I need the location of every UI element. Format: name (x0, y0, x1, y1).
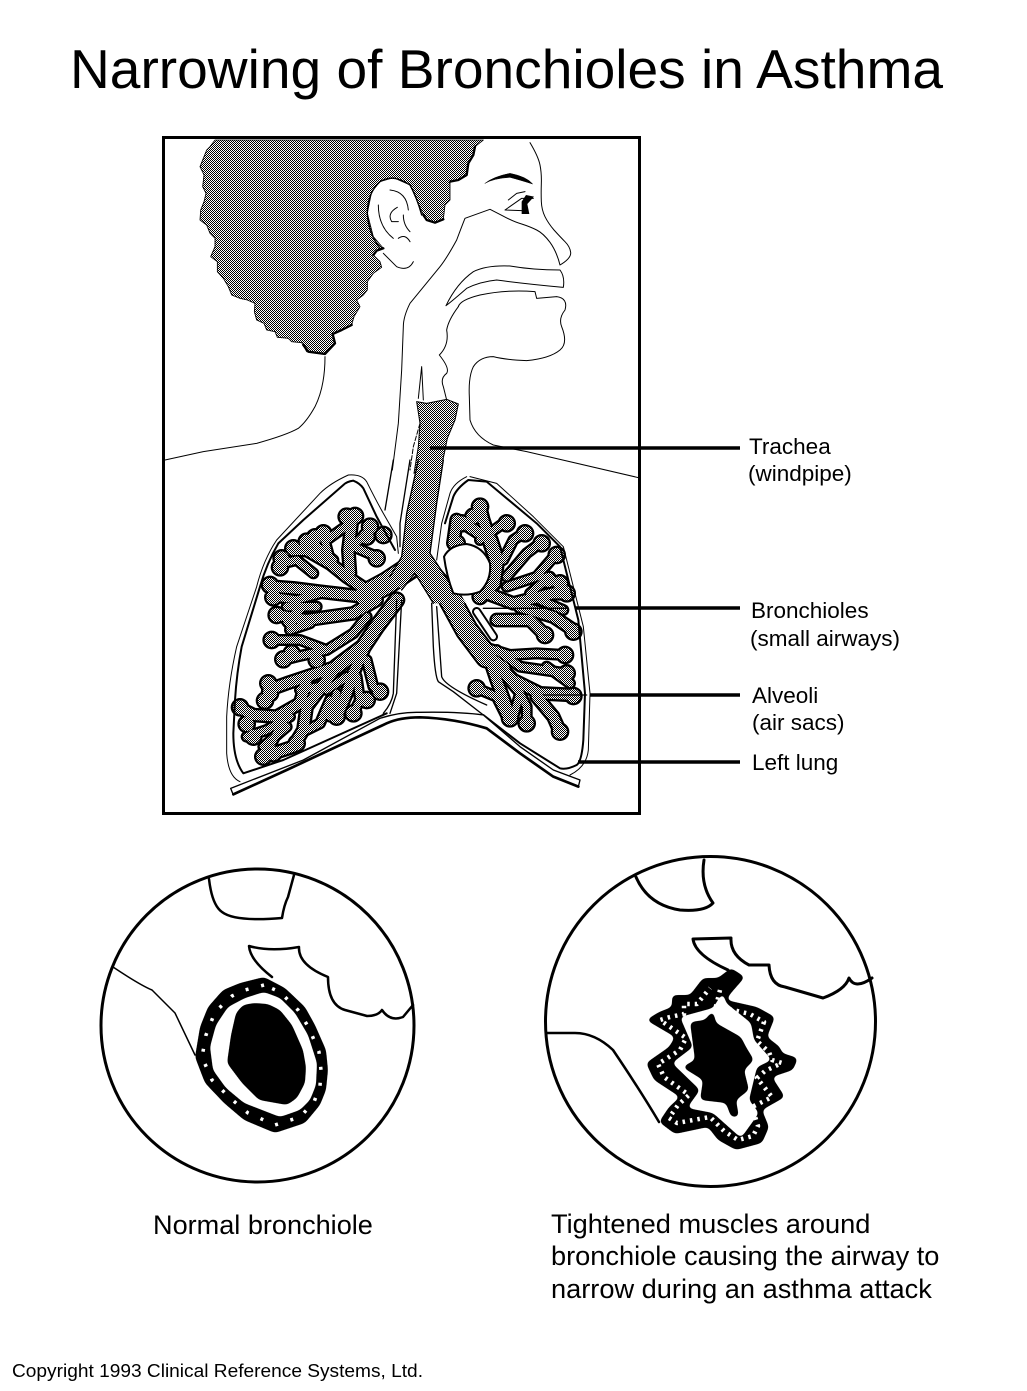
labels: Bronchioles (751, 598, 869, 623)
mouth and palate (446, 266, 640, 478)
throat (418, 307, 458, 400)
caption: tightened muscles: Tightened muscles around (551, 1208, 870, 1239)
labels: (air sacs) (752, 710, 845, 735)
eyebrow (485, 173, 533, 184)
title: Narrowing of Bronchioles in Asthma (70, 38, 943, 100)
labels: (windpipe) (748, 461, 852, 486)
diaphragm (231, 712, 580, 795)
labels (748, 434, 900, 775)
labels: Left lung (752, 750, 838, 775)
copyright: Copyright 1993 Clinical Reference Systems, Ltd. (12, 1361, 423, 1381)
left lung outline (432, 477, 590, 775)
right lung outline (227, 460, 410, 782)
pointers inside lung (483, 608, 587, 695)
bronchial tree shading (233, 461, 580, 764)
caption: tightened muscles: bronchiole causing the airway to (551, 1240, 939, 1271)
labels: Alveoli (752, 683, 818, 708)
back of neck (165, 357, 325, 460)
face profile and nasal cavity (392, 143, 571, 470)
labels: (small airways) (750, 626, 900, 651)
eye (505, 192, 534, 214)
leader lines (430, 448, 740, 762)
caption: tightened muscles: narrow during an asthma attack (551, 1273, 932, 1304)
neck trachea edge (414, 399, 458, 473)
white air pockets (444, 544, 493, 637)
lungs (227, 460, 590, 795)
trachea and carina edges (390, 460, 450, 603)
normal airway wall (195, 977, 328, 1133)
labels: Trachea (749, 434, 831, 459)
hair and neck trachea shading (200, 140, 482, 473)
panel: anatomy frame (164, 138, 640, 814)
panel: normal bronchiole circle (101, 869, 414, 1182)
panel: tightened bronchiole circle (546, 856, 876, 1186)
caption: normal bronchiole: Normal bronchiole (153, 1209, 373, 1240)
head and neck drawing (165, 140, 640, 478)
ear (367, 178, 422, 268)
hair outline (200, 140, 483, 354)
constricted airway wall (646, 968, 798, 1150)
bronchial tree outline (240, 507, 573, 757)
